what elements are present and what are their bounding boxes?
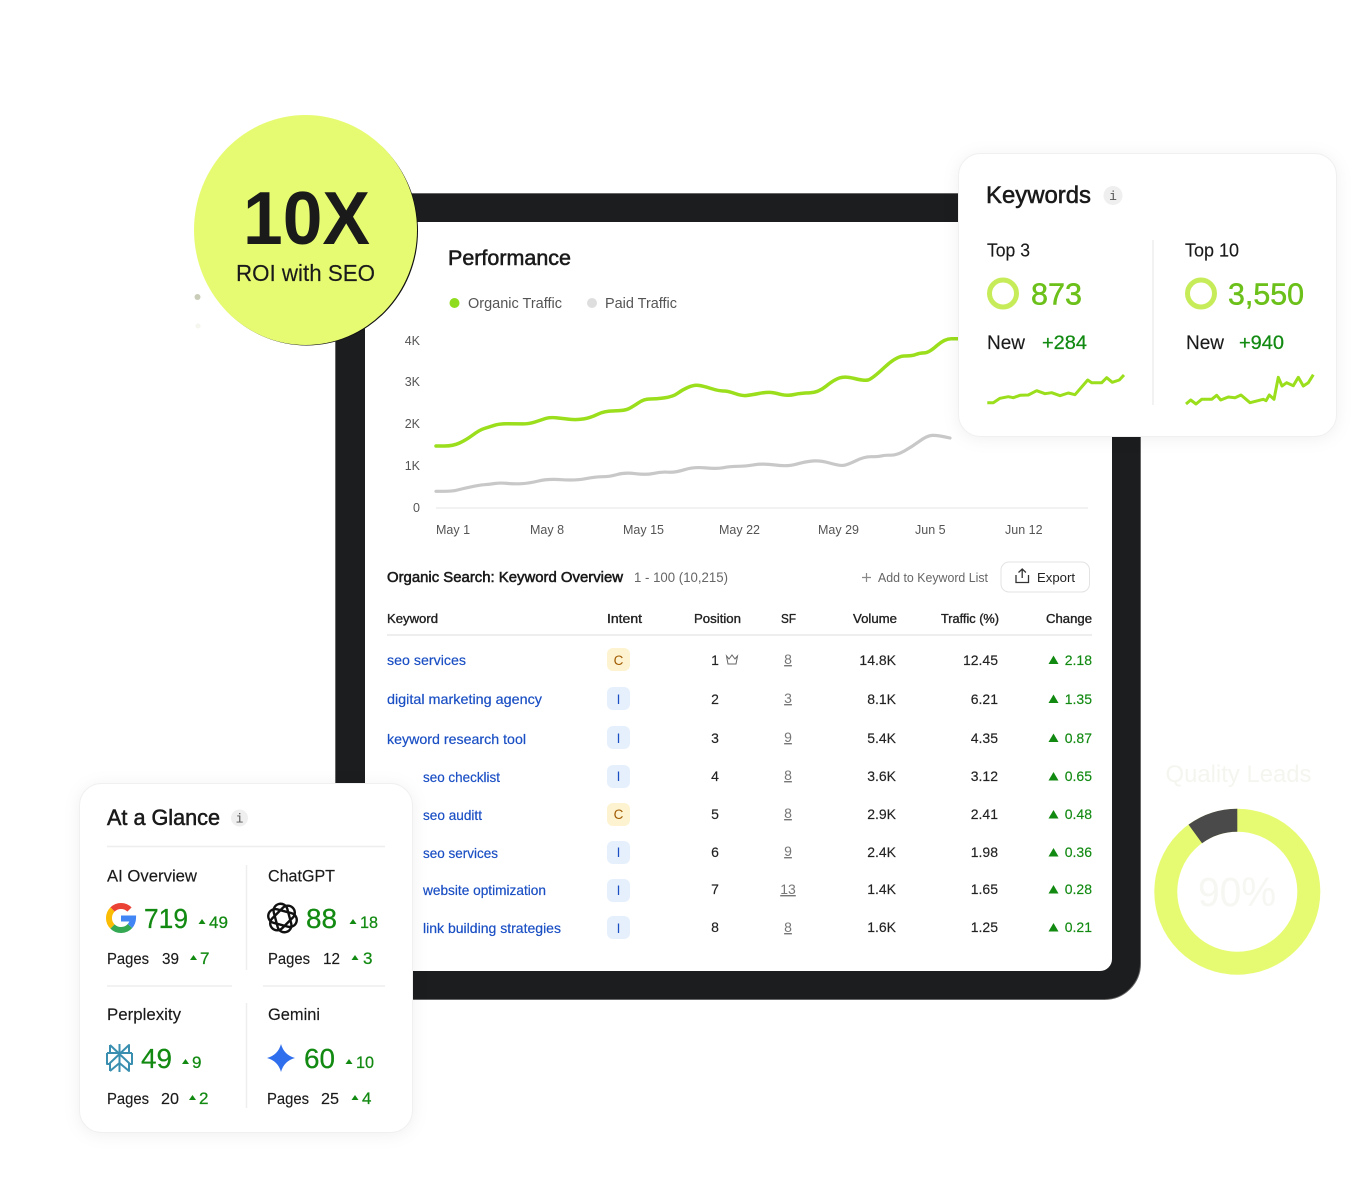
panel: keyword table (387, 562, 1092, 939)
stat: AI overview (107, 866, 228, 968)
line: paid traffic (436, 435, 950, 491)
chart: quality leads donut (1166, 761, 1312, 963)
row 5: 2.41 (971, 806, 998, 822)
badge: 10X ROI: ROI with SEO (236, 260, 375, 286)
stat: top 3: Top 3 (987, 240, 1030, 260)
y axis labels (405, 334, 421, 515)
x axis labels: May 22 (719, 523, 760, 537)
row 5: 8 (784, 805, 792, 821)
stat: gemini: 10 (356, 1053, 374, 1072)
row 6: I (617, 845, 620, 860)
stat: gemini: 60 (304, 1043, 335, 1074)
row 2: 1.35 (1065, 691, 1092, 707)
row 6: 6 (711, 844, 719, 860)
row 3: 5.4K (867, 730, 897, 746)
row 7: I (617, 883, 620, 898)
stat: gemini: 25 (321, 1091, 339, 1108)
row 4: 3.6K (867, 768, 897, 784)
table header: Traffic (%) (941, 612, 999, 626)
icon: perplexity (107, 1044, 132, 1072)
row 6: seo services (423, 845, 498, 861)
stat: top 3: New (987, 333, 1025, 354)
row 3: 3 (711, 730, 719, 746)
heading: at a glance: At a Glance (107, 805, 220, 830)
stat: AI overview: AI Overview (107, 866, 198, 886)
stat: chatgpt: 3 (363, 949, 372, 968)
row 1 (387, 648, 1092, 671)
icon: chatgpt (267, 902, 298, 934)
row 8: 8 (711, 919, 719, 935)
row 6 (423, 841, 1092, 864)
row 4: 8 (784, 767, 792, 783)
row 1: 1 (711, 652, 719, 668)
row 3: 0.87 (1065, 730, 1092, 746)
stat: gemini: 4 (362, 1089, 371, 1108)
stat: top 10: +940 (1239, 333, 1284, 354)
stat: chatgpt: 12 (323, 951, 340, 968)
result count: 1 - 100 (10,215) (634, 570, 728, 585)
y axis labels: 1K (405, 459, 421, 473)
row 6: 2.4K (867, 844, 897, 860)
table header: SF (781, 612, 796, 626)
stat: gemini: Pages (267, 1091, 309, 1108)
row 5: seo auditt (423, 807, 482, 823)
row 4: 4 (711, 768, 719, 784)
row 6: 0.36 (1065, 844, 1092, 860)
row 2: 2 (711, 691, 719, 707)
badge: 10X ROI: 10X (243, 176, 370, 260)
row 1: C (614, 653, 624, 668)
row 7: 0.28 (1065, 881, 1092, 897)
panel: keywords card (958, 154, 1336, 436)
row 7: 1.4K (867, 881, 897, 897)
row 6: 1.98 (971, 844, 998, 860)
y axis labels: 0 (413, 501, 420, 515)
stat: top 3: 873 (1031, 276, 1082, 312)
panel: at a glance card (80, 784, 412, 1132)
stat: chatgpt: 18 (360, 913, 378, 932)
row 5: 2.9K (867, 806, 897, 822)
stat: chatgpt: ChatGPT (268, 866, 335, 886)
export button: Export (1037, 570, 1075, 585)
row 8: I (617, 921, 620, 936)
stat: chatgpt: Pages (268, 951, 310, 968)
row 1: 8 (784, 651, 792, 667)
icon: info (1104, 186, 1122, 205)
y axis labels: 3K (405, 375, 421, 389)
row 7: 1.65 (971, 881, 998, 897)
table header: Change (1046, 612, 1092, 626)
row 8: 0.21 (1065, 919, 1092, 935)
add to keyword list: Add to Keyword List (878, 571, 989, 585)
x axis labels: May 1 (436, 523, 470, 537)
table header: Intent (607, 612, 643, 626)
row 1: seo services (387, 652, 466, 668)
row 4: 3.12 (971, 768, 998, 784)
icon: info: i (236, 812, 244, 826)
row 3: keyword research tool (387, 731, 526, 747)
icon: gemini (267, 1044, 295, 1072)
stat: perplexity: 49 (141, 1043, 172, 1074)
row 3: 4.35 (971, 730, 998, 746)
export button (1001, 562, 1090, 592)
stat: gemini: Gemini (268, 1005, 320, 1024)
donut title: Quality Leads (1166, 761, 1312, 788)
stat: AI overview: 719 (144, 903, 188, 934)
tablet frame (336, 194, 1140, 1000)
row 7: 13 (780, 881, 796, 897)
table title: Organic Search: Keyword Overview (387, 569, 623, 586)
stat: chatgpt (267, 866, 378, 968)
row 3: 9 (784, 729, 792, 745)
stat: top 10 (1185, 240, 1313, 404)
x axis labels: Jun 5 (915, 523, 946, 537)
table header: Position (694, 612, 741, 626)
row 2: digital marketing agency (387, 691, 542, 707)
stat: top 10: Top 10 (1185, 240, 1239, 260)
icon: google (109, 906, 133, 930)
row 1: 2.18 (1065, 652, 1092, 668)
row 6: 9 (784, 843, 792, 859)
table header: Volume (853, 612, 897, 626)
row 7: website optimization (422, 882, 546, 898)
x axis labels: May 29 (818, 523, 859, 537)
stat: perplexity (107, 1005, 208, 1108)
donut value: 90% (1198, 869, 1276, 915)
stat: AI overview: 7 (200, 949, 209, 968)
row 4 (423, 765, 1092, 788)
stat: top 3: +284 (1042, 333, 1087, 354)
y axis labels: 4K (405, 334, 421, 348)
panel: performance chart (405, 247, 1088, 537)
y axis labels: 2K (405, 417, 421, 431)
stat: top 3 (987, 240, 1124, 403)
stat: top 10: 3,550 (1228, 276, 1304, 312)
stat: top 10: New (1186, 333, 1224, 354)
heading: performance: Performance (448, 247, 571, 270)
table header (387, 612, 1092, 626)
stat: perplexity: 20 (161, 1091, 179, 1108)
row 2: I (617, 692, 620, 707)
row 5: 5 (711, 806, 719, 822)
row 4: I (617, 769, 620, 784)
stat: perplexity: Pages (107, 1091, 149, 1108)
legend: Paid Traffic (605, 296, 677, 312)
row 5 (423, 803, 1092, 826)
row 7 (422, 879, 1092, 902)
stat: perplexity: 9 (192, 1053, 201, 1072)
row 8 (423, 916, 1092, 939)
stat: AI overview: 49 (209, 913, 228, 932)
row 1: 14.8K (859, 652, 897, 668)
table header: Keyword (387, 612, 438, 626)
stat: perplexity: 2 (199, 1089, 208, 1108)
row 8: 1.25 (971, 919, 998, 935)
row 8: 8 (784, 919, 792, 935)
stat: AI overview: Pages (107, 951, 149, 968)
row 8: link building strategies (423, 920, 561, 936)
row 2: 8.1K (867, 691, 897, 707)
row 3 (387, 726, 1092, 749)
row 5: 0.48 (1065, 806, 1092, 822)
line: organic traffic (436, 339, 958, 446)
row 2: 3 (784, 690, 792, 706)
legend: Organic Traffic (468, 296, 562, 312)
row 8: 1.6K (867, 919, 897, 935)
row 4: 0.65 (1065, 768, 1092, 784)
stat: perplexity: Perplexity (107, 1005, 181, 1024)
x axis labels: May 15 (623, 523, 664, 537)
x axis labels: May 8 (530, 523, 564, 537)
x axis labels (436, 523, 1043, 537)
heading: keywords: Keywords (986, 182, 1091, 209)
row 5: C (614, 807, 624, 822)
icon: info: i (1109, 189, 1117, 204)
row 3: I (617, 731, 620, 746)
row 2: 6.21 (971, 691, 998, 707)
legend (450, 296, 677, 312)
stat: chatgpt: 88 (306, 903, 337, 934)
stat: AI overview: 39 (162, 951, 179, 968)
x axis labels: Jun 12 (1005, 523, 1043, 537)
row 1: 12.45 (963, 652, 998, 668)
badge: 10X ROI (194, 115, 418, 346)
icon: info (231, 810, 248, 826)
row 4: seo checklist (423, 769, 500, 785)
decorative dots (194, 294, 200, 328)
row 2 (387, 687, 1092, 710)
row 7: 7 (711, 881, 719, 897)
stat: gemini (267, 1005, 374, 1108)
